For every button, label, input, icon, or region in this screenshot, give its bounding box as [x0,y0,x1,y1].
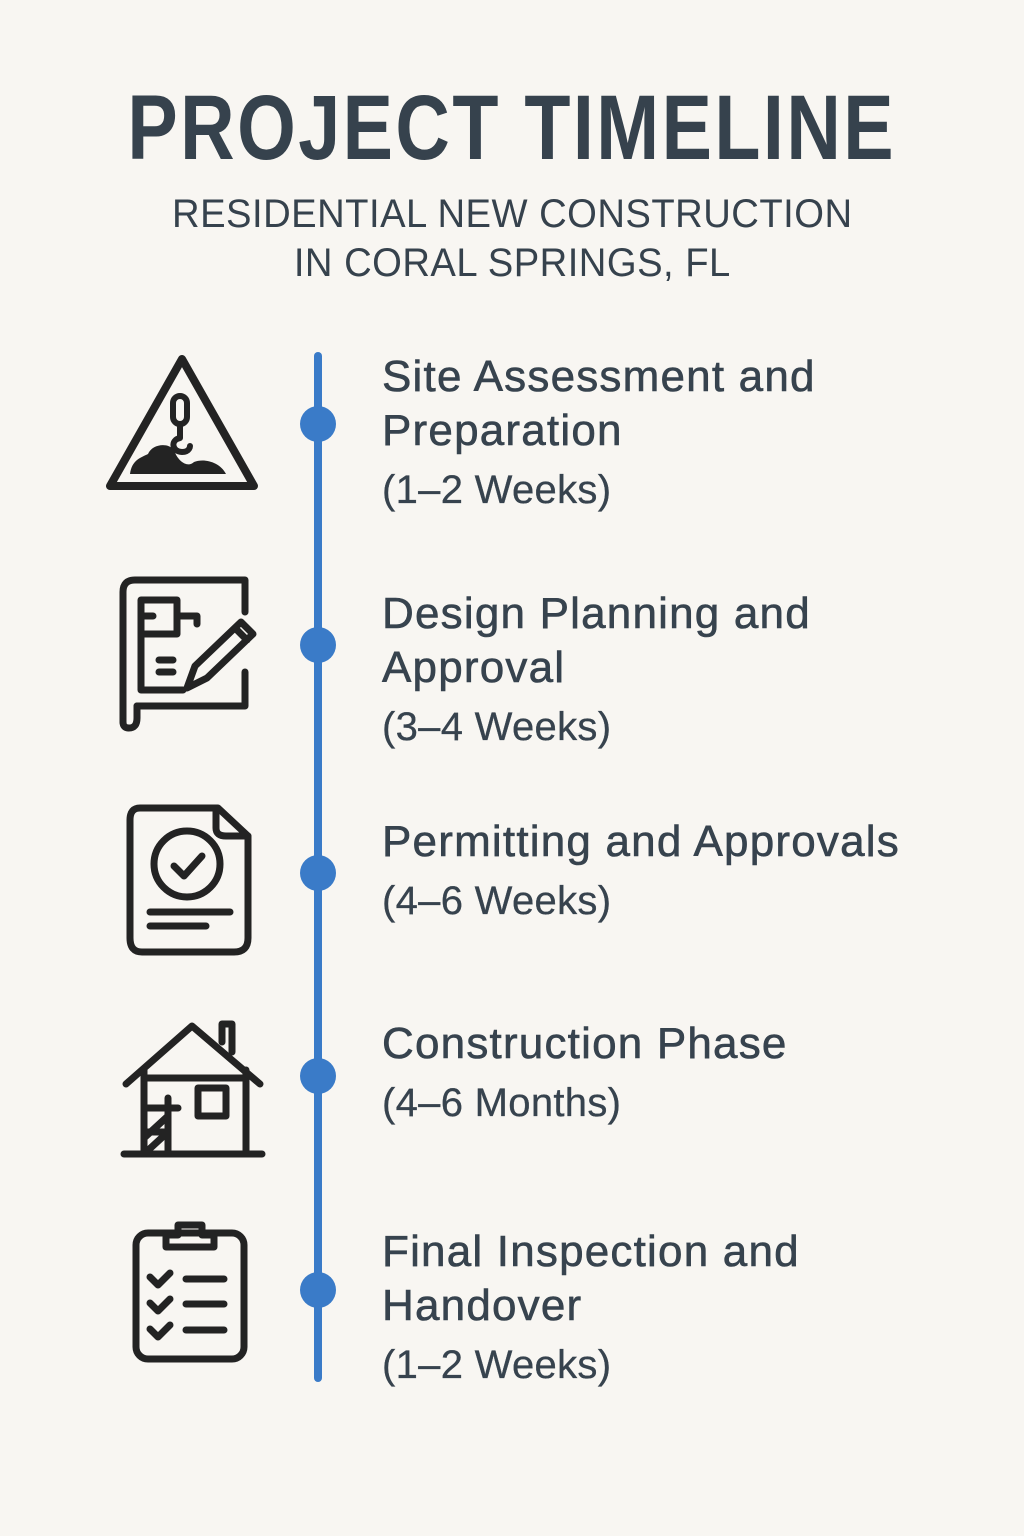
step 4 text: Construction Phase [382,1019,788,1068]
icon: checklist clipboard [132,1222,248,1362]
step 2 text [382,589,811,749]
step 5 text: (1–2 Weeks) [382,1343,611,1387]
icon: permit document [126,804,252,956]
icon: site triangle [106,355,258,490]
subtitle [172,192,852,285]
step 5 text: Handover [382,1281,582,1330]
step 4 text: (4–6 Months) [382,1081,621,1125]
step 2 text: Design Planning and [382,589,811,638]
subtitle: RESIDENTIAL NEW CONSTRUCTION [172,192,852,236]
step 1 text: (1–2 Weeks) [382,468,611,512]
icon: house under construction [120,1020,266,1158]
step 5 text: Final Inspection and [382,1227,800,1276]
step 4 text [382,1019,788,1125]
step 1 text: Preparation [382,406,623,455]
step 1 text [382,352,816,512]
title: PROJECT TIMELINE [128,77,896,179]
step 2 text: (3–4 Weeks) [382,705,611,749]
icon: blueprint [120,576,256,732]
step 1 text: Site Assessment and [382,352,816,401]
step 2 text: Approval [382,643,565,692]
step 3 text: (4–6 Weeks) [382,879,611,923]
subtitle: IN CORAL SPRINGS, FL [294,241,730,285]
step 5 text [382,1227,800,1387]
step 3 text [382,817,900,923]
step 3 text: Permitting and Approvals [382,817,900,866]
